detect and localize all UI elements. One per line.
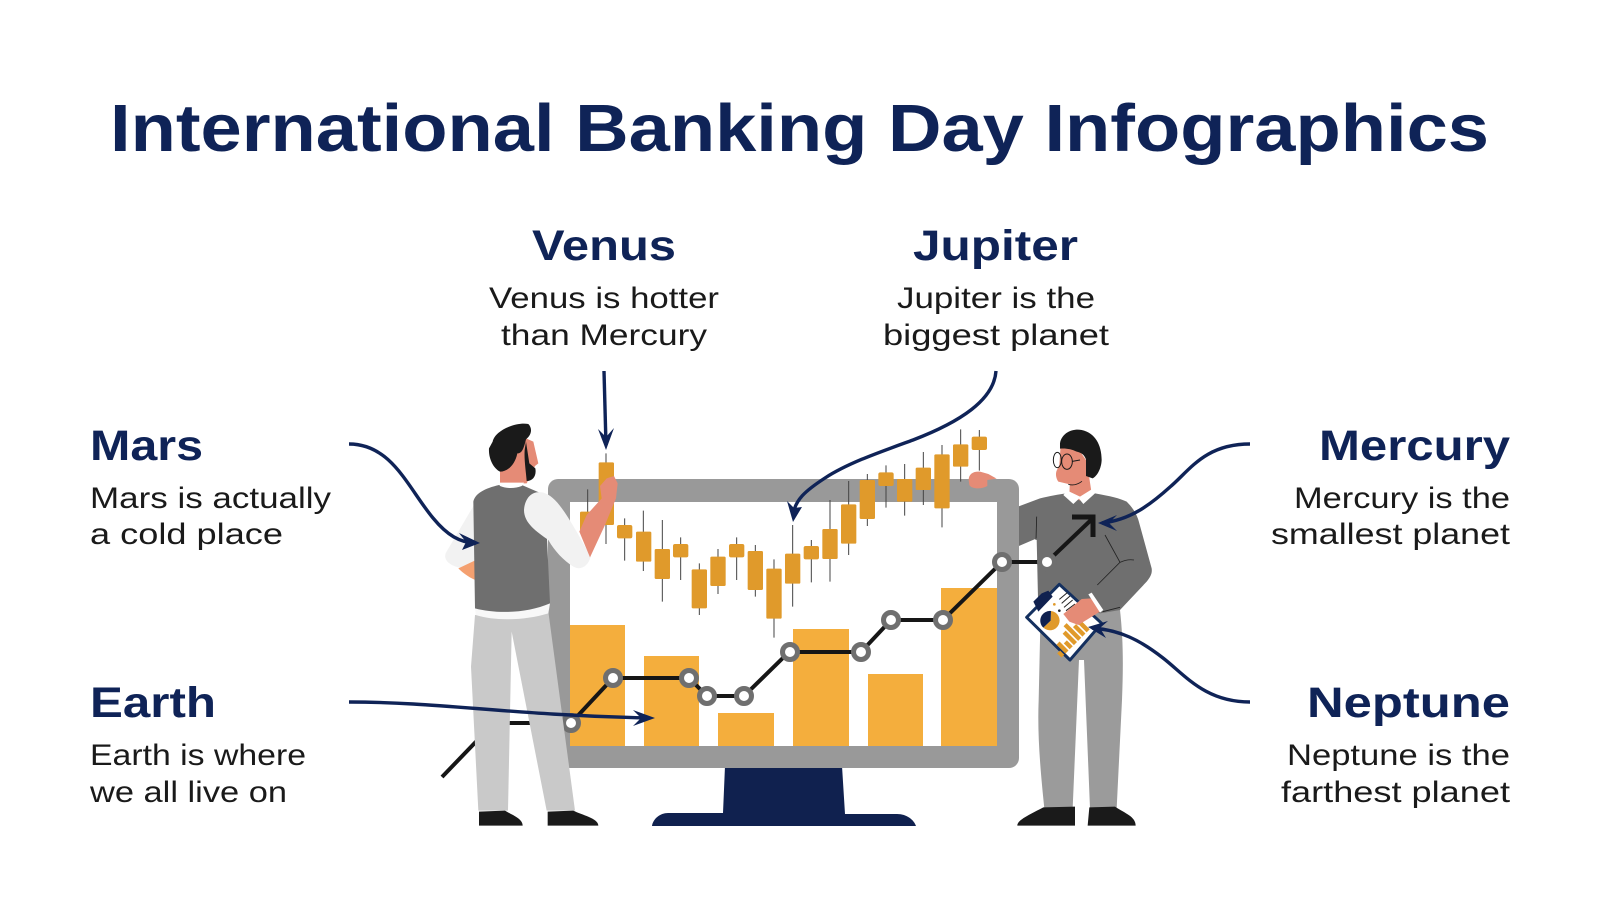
text block: Venus: Venus	[532, 222, 676, 270]
candlestick chart	[580, 429, 987, 638]
sleeve	[524, 492, 591, 568]
arrow: Jupiter	[787, 371, 996, 522]
text block: Earth: Earth is where	[90, 739, 306, 772]
text block: Venus: than Mercury	[501, 319, 707, 352]
neck and face	[500, 438, 538, 483]
text block: Mercury: smallest planet	[1271, 518, 1511, 551]
title: International Banking Day Infographics	[110, 91, 1489, 166]
bar chart	[570, 588, 997, 746]
monitor frame	[548, 479, 1019, 768]
forearm and hand	[579, 476, 618, 557]
text block: Mars: Mars	[90, 422, 203, 470]
monitor	[548, 479, 1019, 826]
text block: Jupiter: Jupiter is the	[897, 282, 1095, 315]
figure: man on the left	[445, 424, 618, 826]
text block: Earth: we all live on	[89, 776, 287, 809]
text block: Neptune: Neptune	[1307, 679, 1510, 727]
text block: Mars: Mars is actually	[90, 482, 331, 515]
trousers	[471, 612, 575, 811]
arrow: Mercury	[1098, 444, 1250, 531]
text block: Earth: Earth	[90, 679, 216, 727]
text block: Neptune: farthest planet	[1281, 776, 1511, 809]
text block: Venus	[489, 222, 719, 352]
hair and beard	[489, 424, 536, 481]
arrow: Venus	[598, 371, 614, 450]
arrow: Mars	[349, 444, 480, 550]
text block: Neptune	[1281, 679, 1511, 809]
arrow: Earth	[349, 702, 655, 726]
monitor stand	[652, 766, 916, 826]
text block: Jupiter	[883, 222, 1110, 352]
collar	[499, 483, 524, 488]
shoes	[479, 811, 598, 826]
text block: Jupiter: Jupiter	[913, 222, 1078, 270]
text block: Neptune: Neptune is the	[1287, 739, 1510, 772]
rising line chart with markers	[442, 517, 1093, 777]
text block: Jupiter: biggest planet	[883, 319, 1110, 352]
shirt hem	[475, 603, 550, 619]
back arm	[445, 505, 478, 568]
arrow: Neptune	[1088, 621, 1250, 702]
figure: man on the right, body behind monitor	[1013, 430, 1152, 826]
text block: Mars	[90, 422, 331, 551]
clipboard in right man's hands	[1027, 584, 1103, 660]
text block: Mercury: Mercury	[1319, 422, 1510, 470]
figure: hand of right man on monitor	[969, 472, 997, 488]
text block: Mercury: Mercury is the	[1294, 482, 1510, 515]
monitor screen	[570, 502, 997, 746]
text block: Mercury	[1271, 422, 1511, 551]
text block: Venus: Venus is hotter	[489, 282, 719, 315]
text block: Earth	[89, 679, 306, 809]
vest	[473, 485, 550, 612]
text block: Mars: a cold place	[90, 518, 283, 551]
